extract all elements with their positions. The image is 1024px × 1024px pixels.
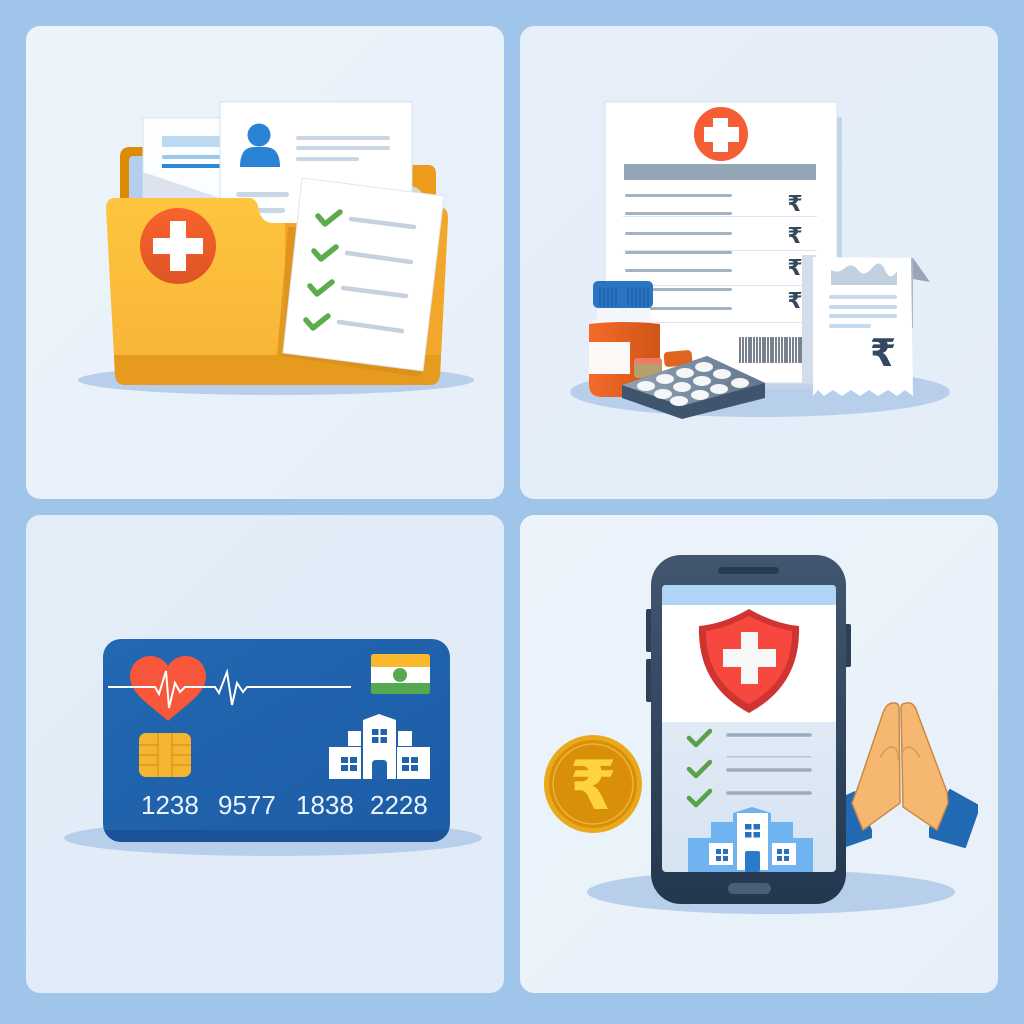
folder front [100,190,455,390]
icon: hospital [329,714,430,779]
checks and lines [689,731,710,805]
medicine bottle [589,281,660,397]
thumbs [880,747,920,760]
pulse line [108,671,351,708]
rupee coin: ₹ [569,748,617,824]
icon: heart [130,656,206,721]
bill document: ₹ [787,288,803,313]
folder back [120,147,436,210]
icon: bill cross badge [694,107,748,161]
rupee coin [544,735,642,833]
ground shadow [570,367,950,417]
phone ground shadow [587,870,955,914]
panel: medical folder [26,26,504,499]
icon: shield [699,609,799,713]
patient profile document [220,102,412,226]
bill document: ₹ [787,191,803,216]
card ground shadow [64,820,482,856]
bill document: ₹ [787,255,803,280]
capsules [634,350,693,378]
folder ground shadow [78,365,474,395]
back document [143,118,233,208]
card number: 1838 [296,790,354,820]
panel: medical bill and medicine [520,26,998,499]
icon: app hospital [688,807,813,872]
checklist page [283,178,444,371]
bill document [605,102,842,389]
receipt: ₹ [870,333,896,375]
card number: 1238 [141,790,199,820]
folded hands [846,703,977,847]
card number: 2228 [370,790,428,820]
phone [646,555,851,904]
card number [141,790,428,820]
icon: person [240,124,280,167]
barcode [740,337,807,363]
phone screen [662,585,836,872]
blister pack [622,356,765,419]
icon: flag [371,654,430,694]
receipt [802,255,930,396]
icon: chip [139,733,191,777]
card number: 9577 [218,790,276,820]
bill document: ₹ [787,223,803,248]
checklist shadow [277,227,423,377]
health card [103,639,450,842]
panel: health app on phone [520,515,998,993]
panel: health card [26,515,504,993]
icon: medical cross badge [140,208,216,284]
